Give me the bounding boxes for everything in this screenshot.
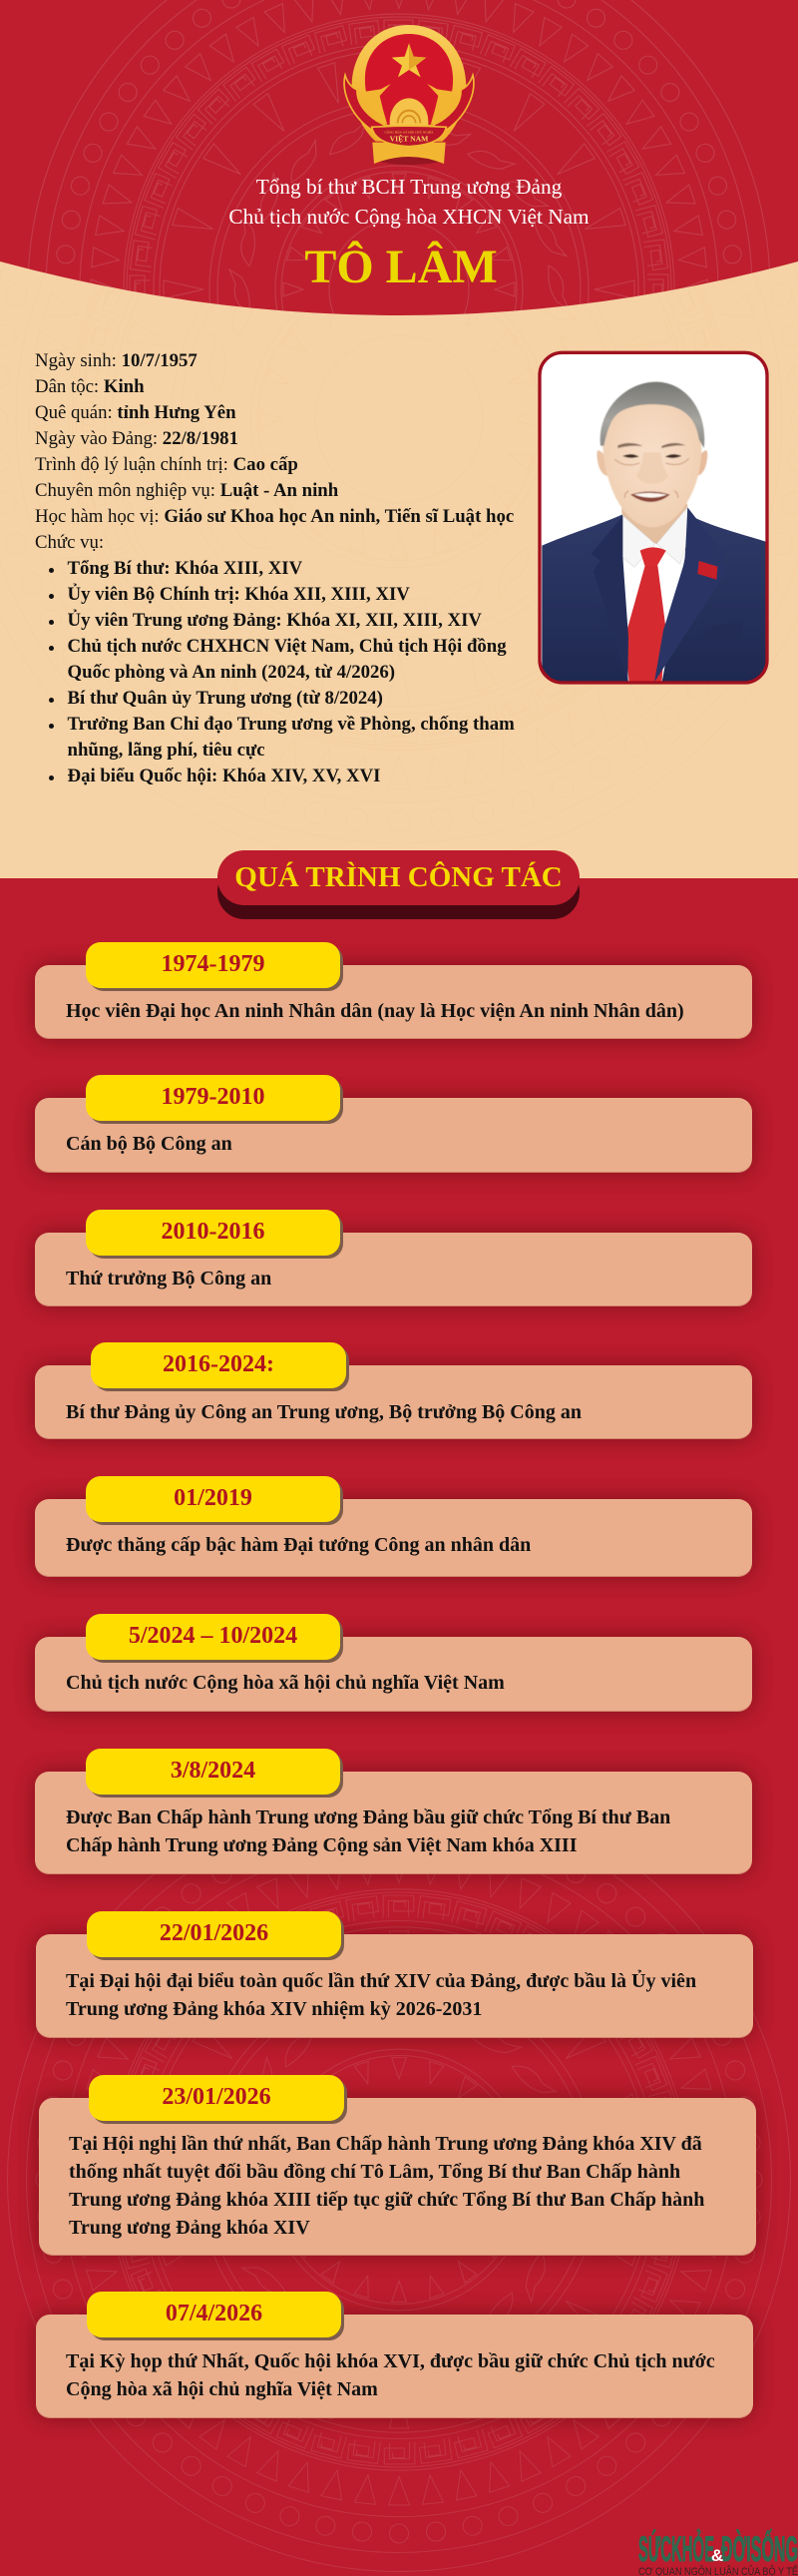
timeline card: 3/8/2024: Chấp hành Trung ương Đảng Cộng sản Việt Nam khóa XIII	[66, 1834, 577, 1856]
timeline card: 22/01/2026: Tại Đại hội đại biểu toàn quốc lần thứ XIV của Đảng, được bầu là Ủy viên	[66, 1970, 696, 1992]
timeline card: 23/01/2026: Trung ương Đảng khóa XIII tiếp tục giữ chức Tổng Bí thư Ban Chấp hành	[69, 2188, 704, 2210]
timeline card: 3/8/2024: Được Ban Chấp hành Trung ương Đảng bầu giữ chức Tổng Bí thư Ban	[66, 1806, 670, 1828]
timeline card: 2016-2024: Bí thư Đảng ủy Công an Trung ương, Bộ trưởng Bộ Công an	[66, 1401, 582, 1423]
panel: personal information: Học hàm học vị: Giáo sư Khoa học An ninh, Tiến sĩ Luật học	[35, 506, 514, 527]
timeline card: 1979-2010: Cán bộ Bộ Công an	[66, 1133, 232, 1155]
panel: personal information: Tổng Bí thư: Khóa XIII, XIV	[68, 558, 302, 579]
timeline card: 22/01/2026	[25, 1911, 764, 2049]
panel: personal information: Quê quán: tỉnh Hưng Yên	[35, 402, 236, 423]
panel: personal information: Quốc phòng và An ninh (2024, từ 4/2026)	[68, 662, 395, 683]
timeline card: 22/01/2026: 22/01/2026	[160, 1920, 268, 1946]
heading: QUÁ TRÌNH CÔNG TÁC: QUÁ TRÌNH CÔNG TÁC	[234, 861, 563, 893]
subtitle: titles	[228, 175, 590, 229]
panel: personal information: Chuyên môn nghiệp vụ: Luật - An ninh	[35, 480, 338, 501]
timeline card: 07/4/2026	[25, 2292, 764, 2429]
panel: personal information: Ủy viên Trung ương Đảng: Khóa XI, XII, XIII, XIV	[68, 610, 482, 631]
timeline card: 23/01/2026	[28, 2075, 767, 2267]
timeline card: 23/01/2026: Trung ương Đảng khóa XIV	[69, 2216, 310, 2238]
subtitle: titles: Chủ tịch nước Cộng hòa XHCN Việt Nam	[228, 205, 590, 229]
panel: personal information	[35, 350, 515, 786]
panel: personal information: Trình độ lý luận chính trị: Cao cấp	[35, 454, 298, 475]
heading: QUÁ TRÌNH CÔNG TÁC	[217, 850, 580, 919]
panel: personal information: Ủy viên Bộ Chính trị: Khóa XII, XIII, XIV	[68, 584, 410, 605]
timeline card: 5/2024 – 10/2024: Chủ tịch nước Cộng hòa xã hội chủ nghĩa Việt Nam	[66, 1672, 505, 1694]
panel: personal information: Trưởng Ban Chỉ đạo Trung ương về Phòng, chống tham	[68, 714, 515, 735]
timeline card: 2010-2016: Thứ trưởng Bộ Công an	[66, 1268, 271, 1289]
icon: national emblem of Vietnam: VIỆT NAM	[390, 135, 428, 144]
timeline card: 1974-1979	[24, 942, 763, 1050]
timeline card: 01/2019	[24, 1476, 763, 1588]
panel: personal information: Ngày vào Đảng: 22/8/1981	[35, 428, 238, 449]
timeline card: 1974-1979: 1974-1979	[162, 951, 265, 977]
timeline card: 3/8/2024	[24, 1749, 763, 1885]
timeline card: 01/2019: Được thăng cấp bậc hàm Đại tướng Công an nhân dân	[66, 1534, 531, 1556]
timeline card: 1979-2010	[24, 1075, 763, 1184]
timeline card: 07/4/2026: Cộng hòa xã hội chủ nghĩa Việt Nam	[66, 2378, 378, 2400]
timeline card: 01/2019: 01/2019	[174, 1485, 252, 1511]
logo: Sức Khỏe & Đời Sống: &	[711, 2546, 723, 2565]
panel: personal information: Đại biểu Quốc hội: Khóa XIV, XV, XVI	[68, 766, 380, 786]
panel: personal information: nhũng, lãng phí, tiêu cực	[68, 740, 265, 761]
panel: personal information: Chủ tịch nước CHXHCN Việt Nam, Chủ tịch Hội đồng	[68, 636, 507, 657]
timeline card: 07/4/2026: Tại Kỳ họp thứ Nhất, Quốc hội khóa XVI, được bầu giữ chức Chủ tịch nước	[66, 2350, 715, 2372]
timeline card: 5/2024 – 10/2024	[24, 1614, 763, 1723]
timeline card: 23/01/2026: Tại Hội nghị lần thứ nhất, Ban Chấp hành Trung ương Đảng khóa XIV đã	[69, 2132, 702, 2154]
timeline card: 2016-2024: 2016-2024:	[163, 1351, 274, 1377]
subtitle: titles: Tổng bí thư BCH Trung ương Đảng	[256, 175, 562, 199]
panel: personal information: Dân tộc: Kinh	[35, 376, 145, 397]
portrait photo illustration	[538, 351, 769, 685]
timeline card: 3/8/2024: 3/8/2024	[171, 1758, 255, 1784]
timeline card: 1974-1979: Học viên Đại học An ninh Nhân dân (nay là Học viện An ninh Nhân dân)	[66, 1000, 684, 1022]
timeline card: 07/4/2026: 07/4/2026	[166, 2301, 262, 2326]
timeline card: 2010-2016	[24, 1210, 763, 1317]
timeline card: 23/01/2026: thống nhất tuyệt đối bầu đồng chí Tô Lâm, Tổng Bí thư Ban Chấp hành	[69, 2160, 680, 2182]
timeline card: 1979-2010: 1979-2010	[162, 1084, 265, 1110]
panel: personal information: Bí thư Quân ủy Trung ương (từ 8/2024)	[68, 688, 383, 709]
timeline card: 5/2024 – 10/2024: 5/2024 – 10/2024	[129, 1623, 297, 1649]
timeline card: 22/01/2026: Trung ương Đảng khóa XIV nhiệm kỳ 2026-2031	[66, 1998, 482, 2020]
icon: national emblem of Vietnam: CỘNG HÒA XÃ HỘI CHỦ NGHĨA	[384, 130, 434, 135]
timeline card: 2010-2016: 2010-2016	[162, 1219, 265, 1245]
timeline card: 2016-2024	[24, 1342, 763, 1450]
title: name: TÔ LÂM	[304, 241, 498, 293]
panel: personal information: Chức vụ:	[35, 532, 104, 553]
icon: national emblem of Vietnam	[343, 25, 475, 165]
timeline card: 23/01/2026: 23/01/2026	[162, 2084, 271, 2110]
panel: personal information: Ngày sinh: 10/7/1957	[35, 350, 198, 371]
